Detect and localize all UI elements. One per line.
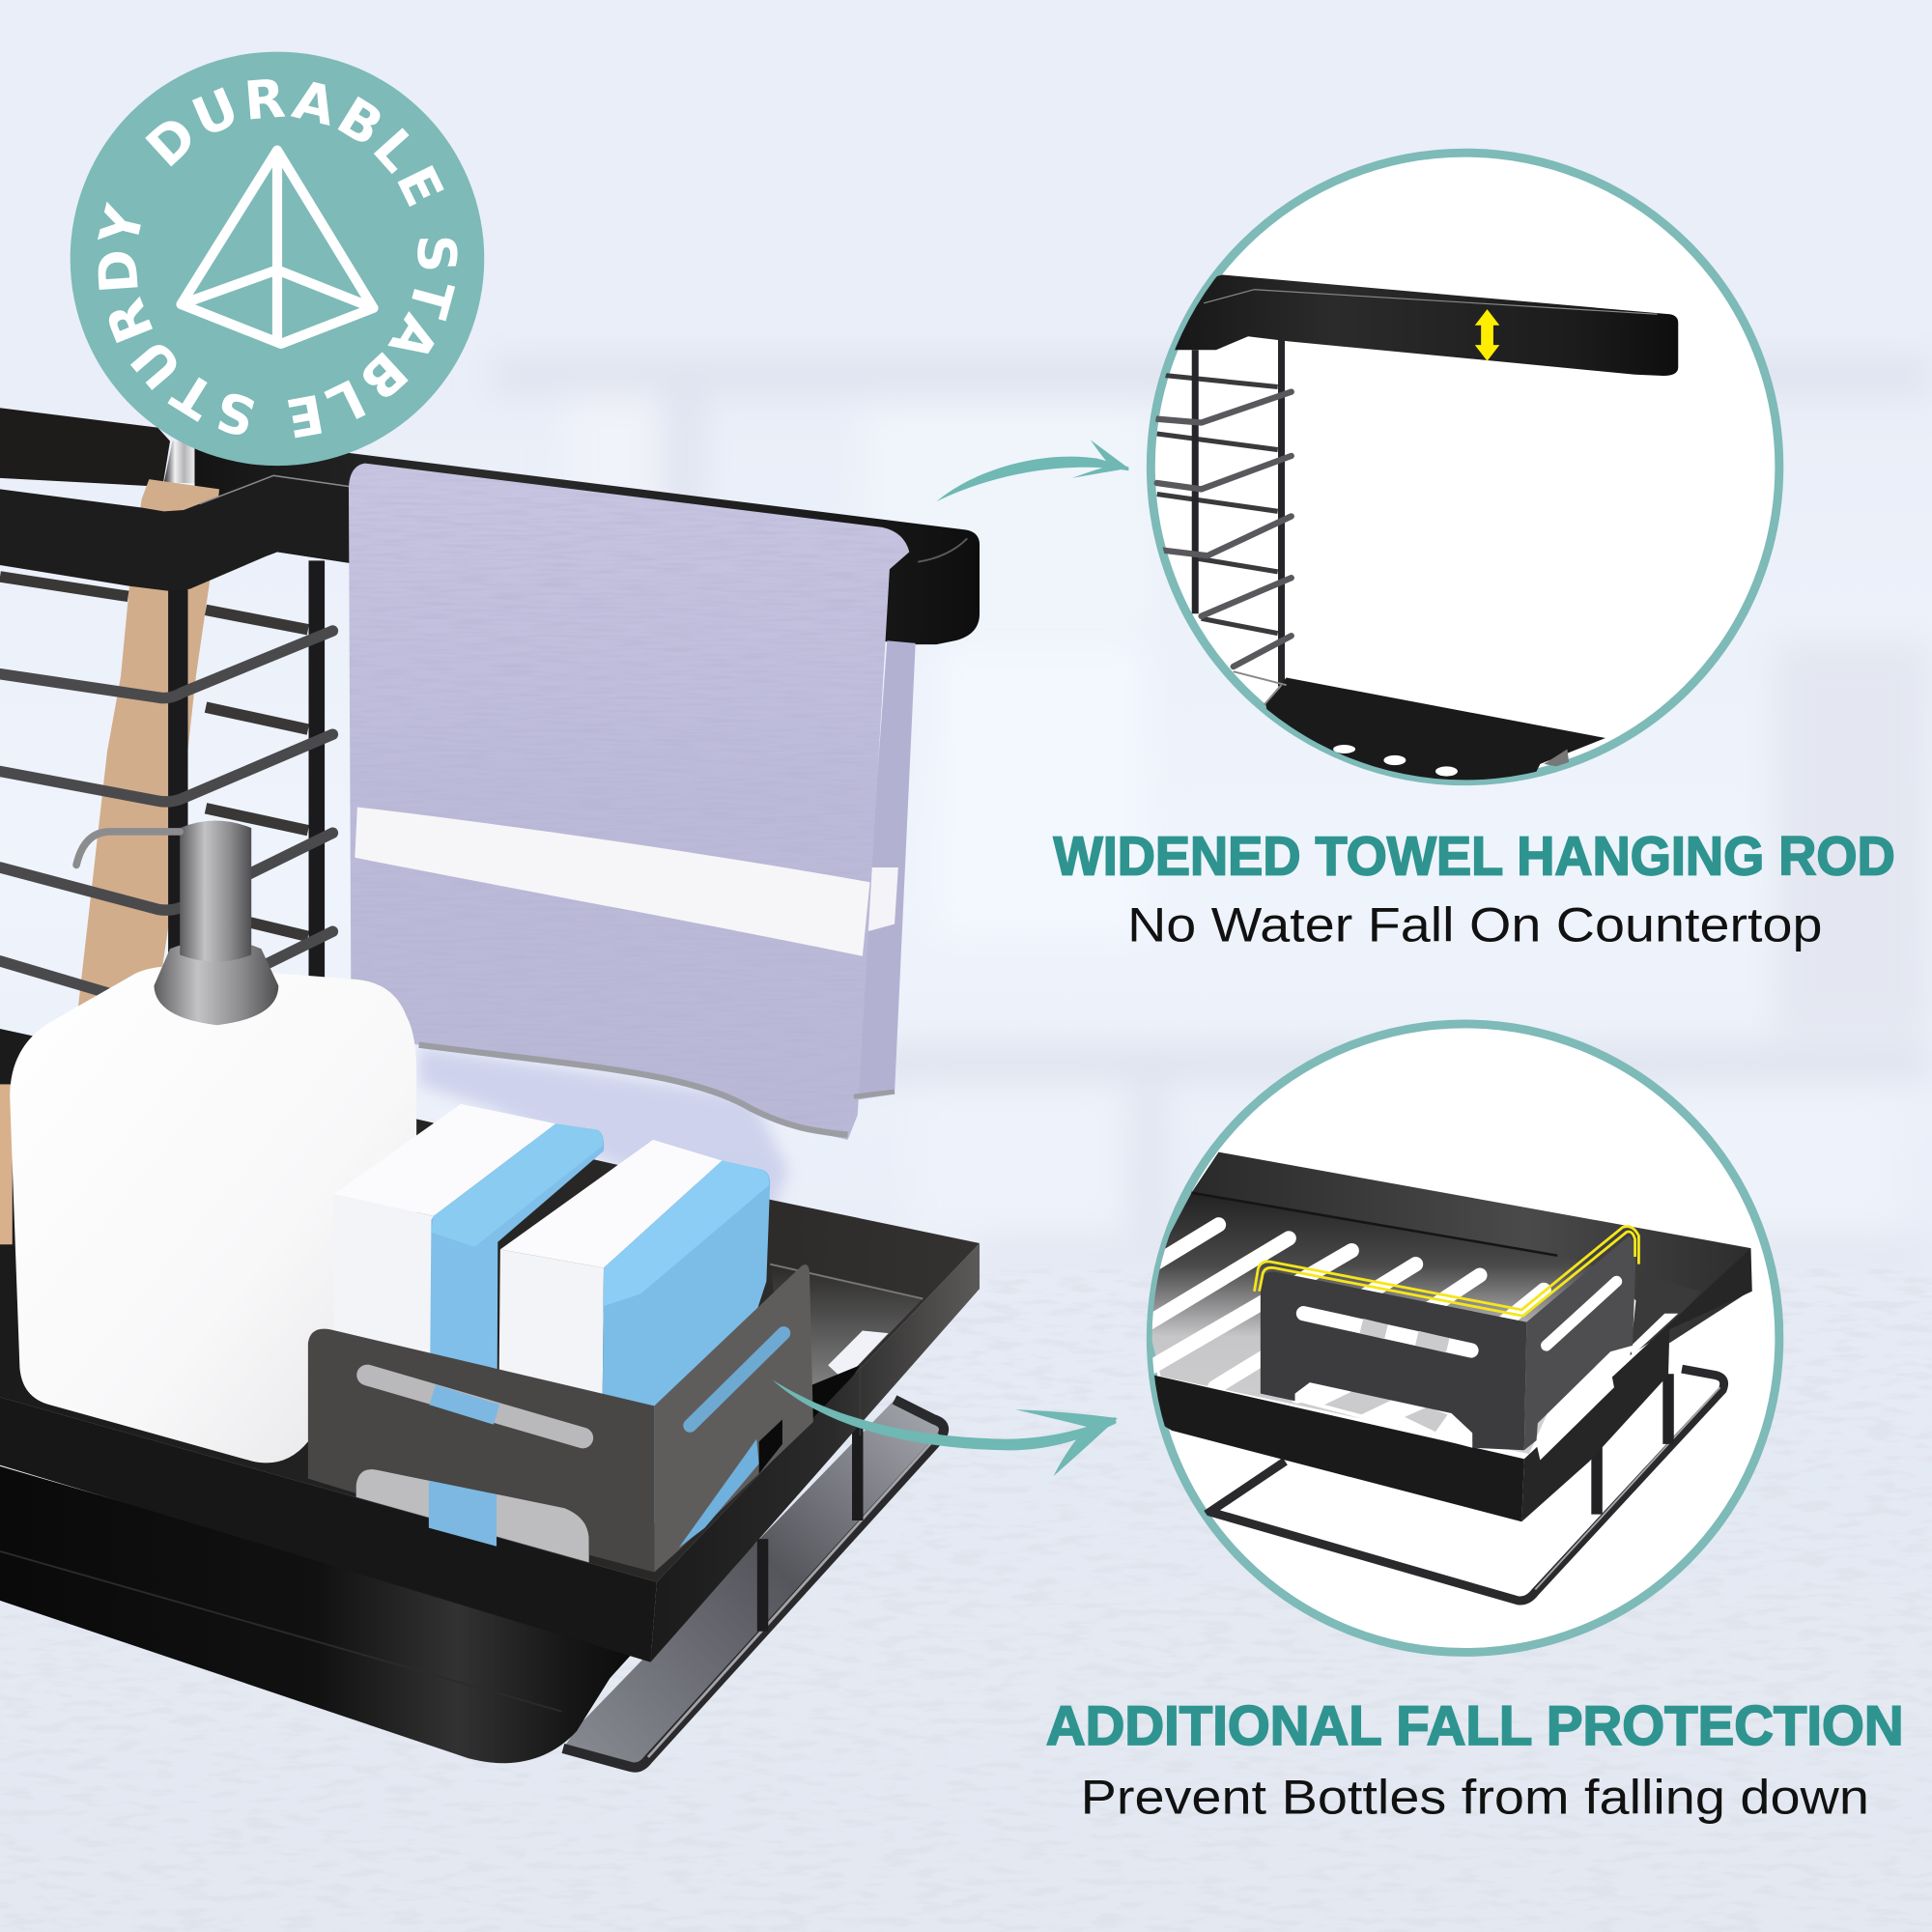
tray ledge xyxy=(770,1264,923,1298)
dark hole xyxy=(812,1365,860,1435)
tray back wall xyxy=(1191,1152,1750,1343)
back left band xyxy=(0,408,170,487)
guard side cutout hole xyxy=(759,1419,782,1474)
curved arrow to towel rod detail xyxy=(936,440,1128,501)
guard cutout xyxy=(356,1469,589,1562)
lower tray xyxy=(1265,678,1605,788)
yellow highlight xyxy=(1254,1227,1638,1316)
pump spout xyxy=(76,832,180,865)
badge: durable stable sturdy xyxy=(70,52,485,466)
guard cutout xyxy=(1295,1382,1472,1448)
towel back flap xyxy=(854,640,916,1100)
upright rods xyxy=(1195,339,1282,686)
subheading: fall protection: Prevent Bottles from falling down xyxy=(1081,1771,1869,1825)
right white band xyxy=(1537,1378,1614,1461)
left basket and towel rail xyxy=(0,408,980,1023)
back rods xyxy=(1157,375,1278,634)
right inner floor xyxy=(1631,1300,1662,1355)
shelf tray front and side faces xyxy=(0,1243,980,1662)
bottle body xyxy=(10,966,416,1463)
sponges xyxy=(334,1104,770,1534)
rail end highlight xyxy=(918,538,967,562)
sponge left xyxy=(334,1104,555,1216)
tray front face xyxy=(1153,1375,1524,1521)
sponge right xyxy=(500,1140,722,1267)
tray right face xyxy=(1521,1248,1752,1521)
towel xyxy=(349,464,916,1140)
guard slits xyxy=(367,1375,582,1438)
icon: pyramid xyxy=(182,151,373,344)
basket front rods xyxy=(0,631,332,1009)
drip tray xyxy=(0,1466,635,1763)
wooden handle xyxy=(76,479,219,1023)
shelf tray interior xyxy=(0,1029,980,1582)
towel back stripe xyxy=(867,867,898,931)
yellow double arrow xyxy=(1475,309,1499,361)
heading: towel rod: WIDENED TOWEL HANGING ROD xyxy=(1054,826,1895,887)
front rods xyxy=(1157,392,1292,667)
detail circle: towel rod xyxy=(1146,153,1779,788)
tray floor xyxy=(1140,1193,1611,1454)
guard front xyxy=(1261,1271,1526,1450)
drip tray lip xyxy=(0,1551,562,1712)
wire frame xyxy=(1210,1369,1724,1601)
towel rod xyxy=(1146,274,1678,376)
frame legs xyxy=(1597,1374,1668,1515)
tray inner floor xyxy=(770,1264,923,1405)
pump collar xyxy=(154,940,278,1025)
base wire frame under tray xyxy=(563,1373,945,1768)
towel shadow xyxy=(419,1047,788,1233)
guard slits xyxy=(1303,1314,1471,1350)
heading: fall protection: ADDITIONAL FALL PROTECTION xyxy=(1046,1695,1904,1757)
wood handle seen beside bottle xyxy=(0,1084,13,1244)
guard side panel xyxy=(654,1264,813,1573)
front frame band xyxy=(0,475,357,591)
basket upright rods xyxy=(178,560,317,1023)
guard side cutout blue xyxy=(679,1439,759,1548)
badge curved text: DURABLE STABLE STURDY xyxy=(98,79,458,439)
detail circle: fall protection xyxy=(1140,1024,1779,1652)
fall protection guard xyxy=(308,1264,813,1573)
basket back rods xyxy=(0,577,308,936)
tray drain slot xyxy=(828,1331,889,1380)
guard side xyxy=(1524,1236,1636,1450)
towel white stripe xyxy=(355,807,870,956)
towel rail back xyxy=(195,434,980,644)
right white slot xyxy=(1629,1314,1678,1355)
curved arrow to guard detail xyxy=(773,1380,1118,1476)
pump stem xyxy=(180,820,251,962)
towel grey hem xyxy=(419,1045,848,1135)
soap dispenser xyxy=(10,820,416,1463)
subheading: towel rod: No Water Fall On Countertop xyxy=(1127,897,1822,952)
knife blade xyxy=(164,441,201,483)
floor slots xyxy=(1146,1225,1544,1426)
guard front panel xyxy=(308,1329,654,1573)
towel front panel xyxy=(349,464,909,1140)
ledge line xyxy=(1191,1193,1557,1256)
